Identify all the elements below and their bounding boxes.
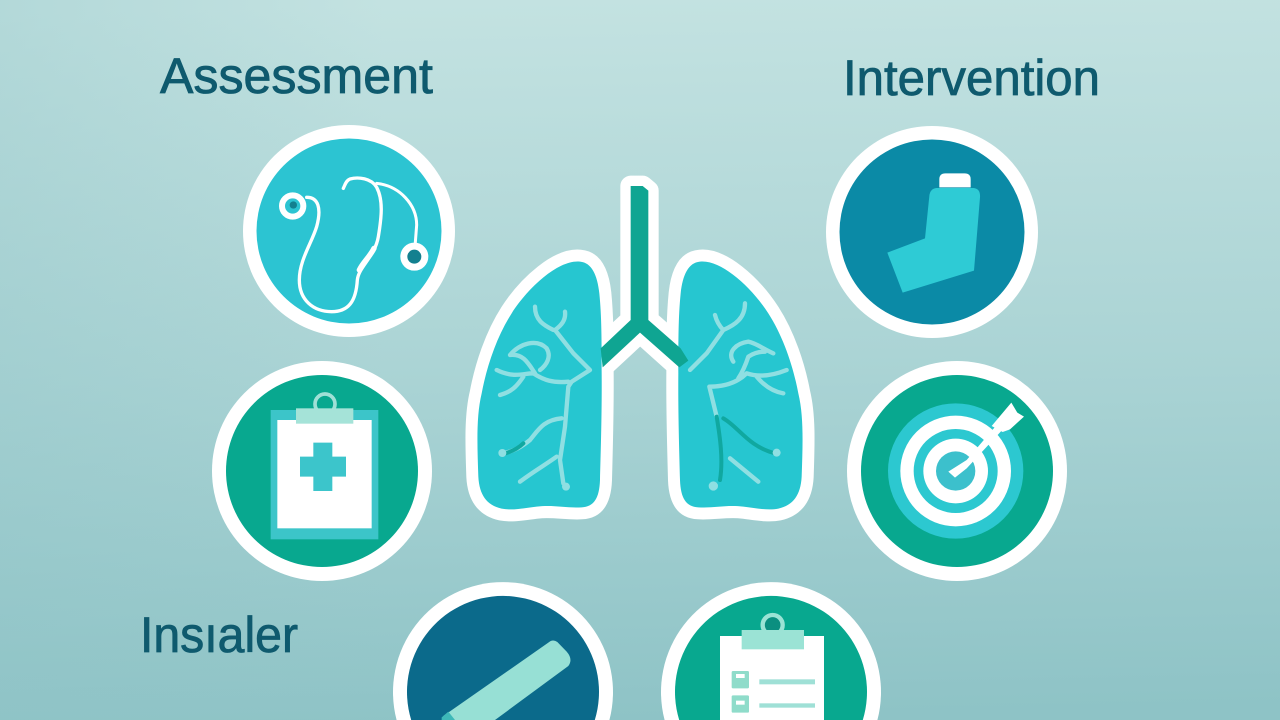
lung fill xyxy=(477,262,803,509)
dark lower branches xyxy=(503,417,775,480)
icon: pale bar in dark blue circle xyxy=(393,582,613,720)
icon: inhaler in blue circle xyxy=(826,126,1038,338)
heading: Intervention: Intervention xyxy=(843,50,1100,106)
branch tips xyxy=(498,449,781,491)
white lung outline xyxy=(477,262,803,509)
heading: Assessment: Assessment xyxy=(160,48,433,104)
icon: checklist clipboard in green circle xyxy=(661,582,881,720)
bronchial branches xyxy=(497,303,787,487)
icon: stethoscope in teal circle xyxy=(243,125,455,337)
heading: Insialer: Insıaler xyxy=(140,607,298,663)
illustration: lungs and trachea xyxy=(477,186,803,509)
trachea fill xyxy=(601,186,688,367)
white trachea outline xyxy=(600,186,681,367)
icon: target with arrow in green circle xyxy=(847,361,1067,581)
icon: medical clipboard in green circle xyxy=(212,361,432,581)
